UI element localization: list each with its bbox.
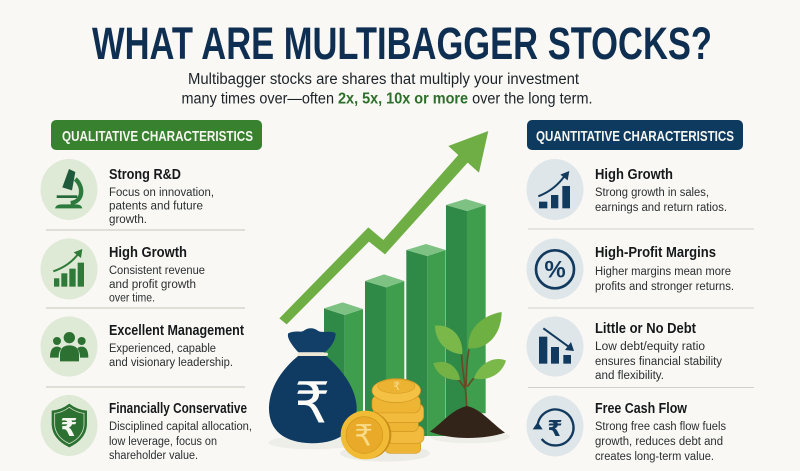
item: high-profit margins: [526, 238, 734, 300]
icon: microscope: [55, 169, 82, 208]
icon: money bag: ₹: [294, 373, 330, 436]
item: strong R&D: growth.: [109, 214, 147, 226]
item: high-profit margins: High-Profit Margins: [595, 245, 716, 261]
item: free cash flow: Strong free cash flow fuels: [595, 421, 726, 433]
item: excellent management: Experienced, capable: [109, 343, 216, 355]
item: strong R&D: Focus on innovation,: [109, 187, 214, 199]
icon: falling chart: [539, 328, 574, 364]
icon: rupee shield: [52, 404, 87, 447]
item: excellent management: and visionary leadership.: [109, 357, 233, 369]
icon: money bag: [269, 328, 357, 443]
heading: qualitative: QUALITATIVE CHARACTERISTICS: [62, 128, 253, 145]
item: high growth: earnings and return ratios.: [595, 202, 727, 214]
item: little or no debt: and flexibility.: [595, 370, 664, 382]
subtitle: many times over—often 2x, 5x, 10x or more over the long term.: [182, 90, 592, 108]
item: strong R&D: [40, 159, 214, 226]
item: strong R&D: Strong R&D: [109, 167, 181, 183]
item: high growth: High Growth: [595, 167, 673, 183]
icon: front coin: [341, 381, 400, 459]
subtitle: Multibagger stocks are shares that multiply your investment: [188, 71, 580, 88]
icon: seedling: [430, 312, 506, 438]
icon: percent: %: [544, 257, 566, 284]
panel: qualitative characteristics: [40, 120, 262, 462]
icon: front coin: ₹: [354, 420, 373, 453]
arrow: rising trend: [279, 131, 488, 324]
item: excellent management: Excellent Management: [109, 323, 244, 339]
item: high growth: Strong growth in sales,: [595, 187, 709, 199]
item: high-profit margins: Higher margins mean more: [595, 266, 731, 278]
item: high-profit margins: profits and stronger returns.: [595, 281, 734, 293]
icon: coin stack: [372, 379, 424, 453]
item: financially conservative: Financially Conservative: [109, 401, 247, 417]
item: excellent management: [40, 316, 244, 376]
panel: quantitative characteristics: [526, 120, 754, 463]
icon: growth chart: [53, 249, 84, 287]
icon: rupee cycle: ₹: [547, 416, 563, 441]
heading: qualitative: [51, 120, 262, 150]
item: financially conservative: [40, 395, 252, 462]
icon: people: [50, 332, 88, 361]
icon: rupee cycle: [533, 409, 573, 445]
item: free cash flow: [526, 396, 726, 463]
item: high growth: over time.: [109, 292, 155, 304]
icon: growth chart: [538, 171, 570, 208]
icon: percent: [536, 250, 574, 288]
item: high growth: High Growth: [109, 245, 187, 261]
item: little or no debt: Low debt/equity ratio: [595, 341, 705, 353]
heading: quantitative: [527, 120, 743, 150]
item: high growth: [526, 159, 727, 220]
item: financially conservative: Disciplined capital allocation,: [109, 421, 252, 433]
item: little or no debt: Little or No Debt: [595, 321, 696, 337]
subtitle: [182, 71, 592, 108]
item: high growth: Consistent revenue: [109, 265, 205, 277]
item: little or no debt: ensures financial stability: [595, 356, 722, 368]
item: high growth: and profit growth: [109, 279, 196, 291]
item: financially conservative: low leverage, focus on: [109, 436, 217, 448]
item: free cash flow: Free Cash Flow: [595, 401, 688, 417]
bar chart: [324, 199, 486, 436]
icon: front coin: ₹: [393, 381, 400, 393]
item: high growth: [40, 238, 205, 304]
item: financially conservative: shareholder value.: [109, 450, 198, 462]
central illustration: [268, 131, 510, 462]
item: strong R&D: patents and future: [109, 200, 203, 212]
heading: quantitative: QUANTITATIVE CHARACTERISTICS: [536, 128, 734, 145]
item: free cash flow: creates long-term value.: [595, 451, 714, 463]
item: free cash flow: growth, reduces debt and: [595, 436, 723, 448]
item: little or no debt: [526, 316, 722, 382]
icon: rupee shield: ₹: [60, 415, 78, 442]
